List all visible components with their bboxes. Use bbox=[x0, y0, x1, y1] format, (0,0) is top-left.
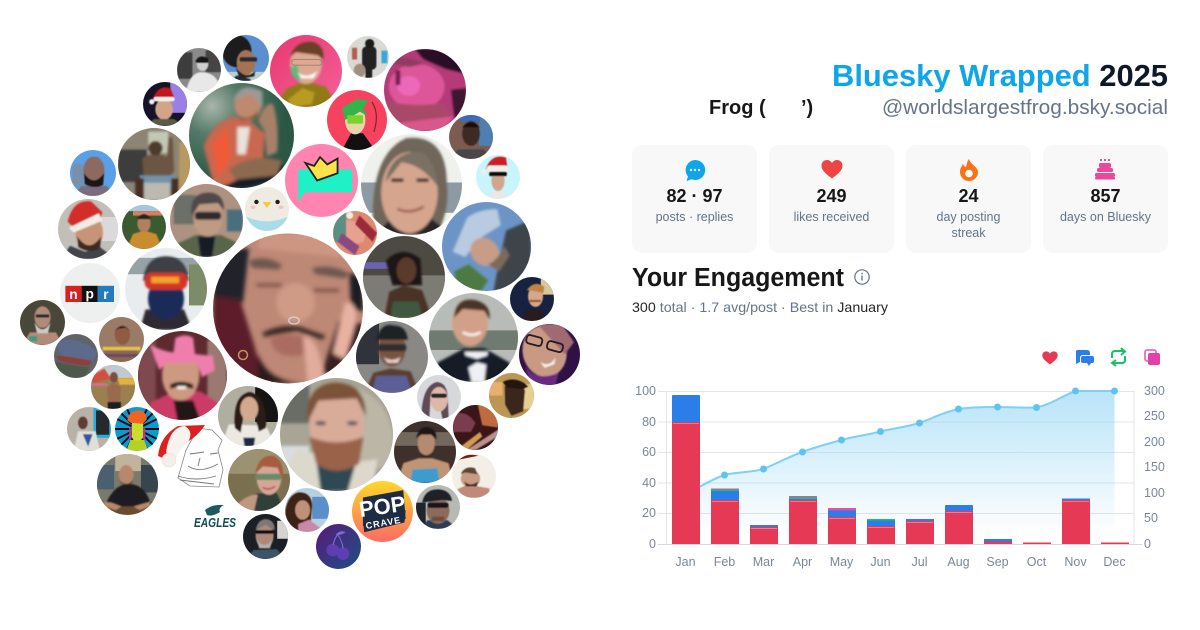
avatar: plush bird bbox=[245, 187, 289, 231]
month labels: Aug bbox=[947, 555, 970, 569]
avatar: pop crave logo: CRAVE bbox=[365, 515, 402, 531]
avatar: pop crave logo: POP bbox=[358, 491, 407, 522]
panel: likes received: 249 bbox=[816, 186, 847, 206]
legend icons bbox=[1042, 348, 1160, 366]
avatar: sky and bald selfie bbox=[442, 202, 531, 291]
panel: likes received bbox=[769, 145, 894, 253]
avatar: orange jacket man bbox=[122, 205, 166, 249]
left axis labels: 20 bbox=[642, 506, 656, 520]
month labels: Apr bbox=[793, 555, 812, 569]
panel: posts and replies: posts · replies bbox=[656, 210, 733, 224]
heading: Your Engagement: Your Engagement bbox=[632, 264, 844, 292]
title: Bluesky Wrapped 2025 bbox=[832, 58, 1168, 93]
avatar: pink tinted face bbox=[384, 49, 466, 131]
panel: day posting streak bbox=[906, 145, 1031, 253]
right axis labels bbox=[1144, 384, 1165, 551]
avatar: wedding tuxedo bbox=[429, 293, 518, 382]
bar highlights bbox=[673, 424, 1089, 528]
avatar: ginger bearded selfie bbox=[280, 378, 393, 491]
right axis labels: 250 bbox=[1144, 409, 1165, 423]
engagement summary: 300 total · 1.7 avg/post · Best in January bbox=[632, 299, 888, 315]
left axis labels: 80 bbox=[642, 415, 656, 429]
avatar: black and white portrait bbox=[177, 48, 221, 92]
icon: chat bubble bbox=[686, 160, 705, 181]
panel: days on Bluesky: 857 bbox=[1090, 186, 1121, 206]
icon: likes bbox=[1042, 351, 1058, 364]
avatar: ski goggles bbox=[125, 248, 207, 330]
avatar: woman with green glasses bbox=[228, 449, 290, 511]
panel: day posting streak: day posting bbox=[937, 210, 1001, 224]
likes bars bbox=[672, 422, 1129, 544]
right axis labels: 100 bbox=[1144, 486, 1165, 500]
avatar: neon cartoon sunburst bbox=[115, 407, 159, 451]
handle: @worldslargestfrog.bsky.social bbox=[882, 96, 1168, 119]
month labels: Jan bbox=[675, 555, 696, 569]
month labels: Nov bbox=[1064, 555, 1087, 569]
avatar: santa hat sketch bbox=[158, 425, 223, 487]
stacked bars bbox=[672, 395, 1129, 544]
avatar: eagles logo bbox=[194, 505, 237, 530]
avatar: big face with nose ring bbox=[213, 234, 363, 384]
avatar: curly hair and glasses bbox=[223, 35, 269, 81]
panel: days on Bluesky: days on Bluesky bbox=[1060, 210, 1152, 224]
left axis labels bbox=[635, 384, 656, 551]
avatar: studio back view bbox=[118, 128, 190, 200]
right axis labels: 200 bbox=[1144, 435, 1165, 449]
left axis labels: 0 bbox=[649, 537, 656, 551]
avatar: selfie white background bbox=[452, 454, 496, 498]
avatar: cherries logo bbox=[316, 524, 361, 569]
avatar: pink cowboy hat bbox=[138, 331, 227, 420]
avatar: red cartoon with green hair bbox=[327, 90, 387, 150]
avatar: blue tank top bbox=[394, 421, 456, 483]
panel: posts and replies bbox=[632, 145, 757, 253]
avatar: tattooed man with beard bbox=[20, 300, 65, 345]
panel: day posting streak: 24 bbox=[958, 186, 979, 206]
avatar: santa hat man purple background bbox=[143, 82, 187, 126]
right axis labels: 50 bbox=[1144, 511, 1158, 525]
display name: Frog ( bbox=[709, 97, 766, 119]
left axis labels: 60 bbox=[642, 445, 656, 459]
panel: day posting streak: streak bbox=[951, 226, 986, 240]
month labels: Dec bbox=[1103, 555, 1126, 569]
avatar: man with cap and sunglasses bbox=[416, 485, 460, 529]
avatar: pop crave logo bbox=[352, 481, 413, 542]
avatar: tank top with glasses bbox=[356, 321, 428, 393]
month labels: Mar bbox=[753, 555, 774, 569]
sketch head bbox=[178, 428, 223, 487]
avatar: smiling woman with grey hair bbox=[361, 134, 462, 235]
month labels: Jul bbox=[912, 555, 927, 569]
avatar: santa hat bearded man bbox=[58, 199, 118, 259]
right axis labels: 0 bbox=[1144, 537, 1151, 551]
month labels: Feb bbox=[714, 555, 735, 569]
avatar: glasses and patterned jacket bbox=[170, 184, 243, 257]
avatar: child in striped shirt bbox=[99, 317, 144, 362]
avatar: crown chat logo bbox=[285, 144, 358, 217]
santa hat bbox=[158, 425, 205, 462]
quote and repost caps bbox=[711, 488, 895, 520]
avatar: golden side profile bbox=[489, 373, 534, 418]
avatar: man in black shirt bbox=[97, 454, 158, 515]
avatar: black man selfie bbox=[449, 115, 493, 159]
grid lines bbox=[658, 391, 1134, 544]
avatar: npr logo: n bbox=[69, 287, 78, 302]
avatar: curly hair woman bbox=[285, 488, 329, 532]
avatar: green background flannel man bbox=[189, 83, 294, 188]
avatar: pink comic art bbox=[333, 211, 377, 255]
right axis labels: 300 bbox=[1144, 384, 1165, 398]
combo chart: engagement by month bbox=[635, 384, 1165, 569]
month labels: Oct bbox=[1027, 555, 1047, 569]
icon: flame bbox=[960, 159, 978, 181]
cumulative line bbox=[686, 391, 1114, 494]
icon: reposts bbox=[1112, 348, 1125, 366]
panel: days on Bluesky bbox=[1043, 145, 1168, 253]
icon: quotes bbox=[1145, 350, 1160, 365]
replies bars bbox=[672, 395, 1090, 542]
avatar: grey bearded man in car bbox=[243, 514, 288, 559]
left axis labels: 40 bbox=[642, 476, 656, 490]
display name: ’) bbox=[801, 97, 813, 119]
avatar: figure in black with dog bbox=[347, 36, 389, 78]
avatar: npr logo: p bbox=[85, 286, 94, 301]
avatar: alligator bbox=[54, 334, 98, 378]
avatar cluster bbox=[20, 35, 580, 569]
left axis labels: 100 bbox=[635, 384, 656, 398]
avatar: npr logo: r bbox=[103, 287, 109, 302]
avatar: beach shirtless bbox=[91, 365, 135, 409]
month labels bbox=[675, 555, 1126, 569]
month labels: May bbox=[830, 555, 854, 569]
icon: info bbox=[855, 270, 869, 284]
icon: replies bbox=[1076, 350, 1094, 366]
right axis labels: 150 bbox=[1144, 460, 1165, 474]
avatar: dark haired woman bbox=[218, 386, 278, 446]
avatar: bald bearded man on blue bbox=[70, 150, 116, 196]
avatar: woman with sunglasses sketch bbox=[417, 375, 461, 419]
avatar: npr logo bbox=[60, 263, 120, 323]
month labels: Sep bbox=[986, 555, 1009, 569]
avatar: pink background smiling man bbox=[270, 35, 342, 107]
avatar: eagles logo: EAGLES bbox=[194, 516, 237, 530]
icon: cake bbox=[1095, 159, 1115, 180]
icon: heart bbox=[822, 160, 842, 178]
panel: likes received: likes received bbox=[794, 210, 869, 224]
line points bbox=[721, 388, 1118, 478]
avatar: purple tinted glasses man bbox=[519, 324, 580, 385]
avatar: santa hat sunglasses on light blue bbox=[476, 155, 520, 199]
panel: posts and replies: 82 · 97 bbox=[666, 186, 723, 206]
avatar: 3D character with glasses bbox=[363, 236, 445, 318]
cumulative area bbox=[686, 391, 1114, 544]
avatar: superman shirt bbox=[67, 407, 111, 451]
avatar: reddish blurred bbox=[453, 405, 498, 450]
month labels: Jun bbox=[870, 555, 891, 569]
display name bbox=[709, 97, 813, 119]
avatar: ginger man bbox=[510, 277, 554, 321]
